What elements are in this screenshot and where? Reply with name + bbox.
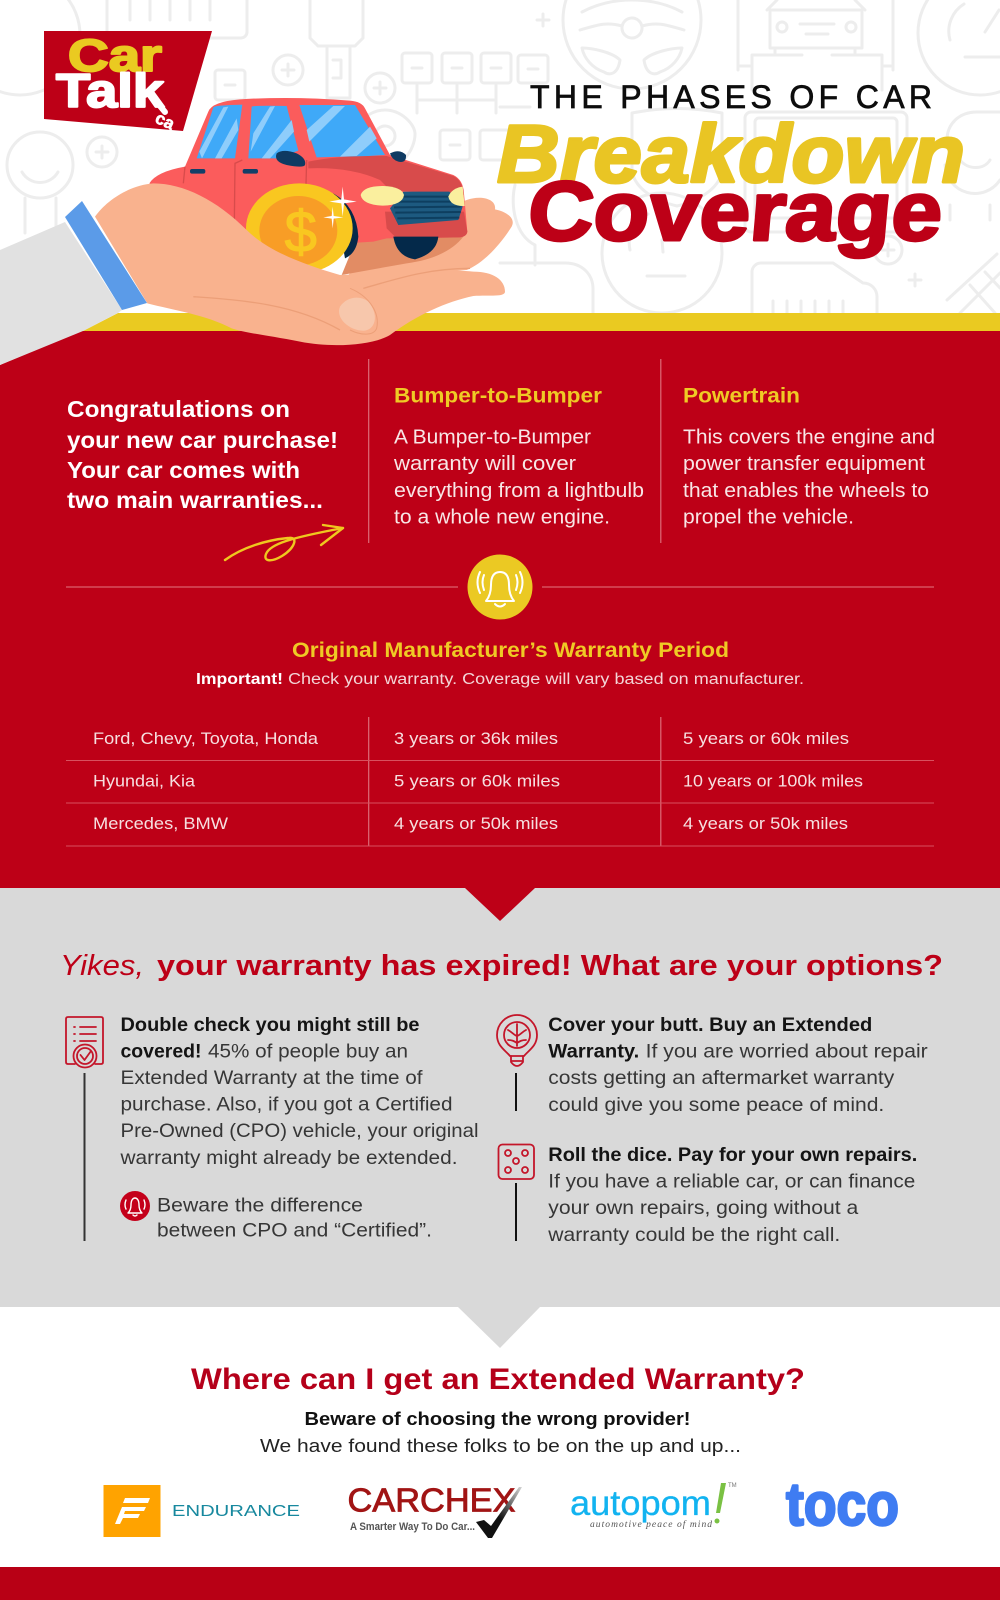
timeline line: first option [84,1073,86,1241]
footer band [0,1567,1000,1600]
logo: Autopom: automotive peace of mind [590,1519,712,1530]
text: double check: covered! [120,1040,202,1062]
table: warranty periods by manufacturer: 3 years or 36k miles [394,729,558,748]
logo: Endurance [104,1485,300,1537]
icon: document with check [66,1017,103,1068]
panel: powertrain [683,384,935,528]
text: extended warranty: costs getting an aftermarket warranty [548,1067,895,1089]
text: extended warranty: Cover your butt. Buy an Extended [548,1014,872,1036]
intro text: Your car comes with [67,457,300,483]
timeline line: second option [515,1073,517,1111]
arrow notch: red pointer [465,888,535,921]
panel: bumper-to-bumper: to a whole new engine. [394,506,610,528]
panel: bumper-to-bumper: A Bumper-to-Bumper [394,426,591,448]
panel: bumper-to-bumper: warranty will cover [393,453,576,475]
logo: Endurance: ENDURANCE [172,1503,300,1520]
text: extended warranty: If you are worried about repair [646,1040,928,1062]
thumb nail [339,298,375,331]
text: double check: warranty might already be extended. [119,1147,458,1169]
yellow band [83,313,1000,331]
text: beware CPO [157,1194,432,1242]
text: double check: 45% of people buy an [208,1040,408,1062]
text: double check [119,1014,479,1169]
panel: powertrain: that enables the wheels to [683,480,929,502]
car [149,98,467,259]
text: double check: Pre-Owned (CPO) vehicle, your original [120,1120,479,1142]
front palm and thumb [95,183,505,345]
logo: Toco: toco [786,1471,899,1538]
thumb outline [350,288,377,334]
timeline line: third option [515,1183,517,1241]
logo: Autopom: autopom [570,1484,711,1523]
icon: small red bell [120,1191,150,1221]
table: warranty periods by manufacturer: 4 years or 50k miles [394,814,558,833]
text: roll the dice: your own repairs, going without a [548,1197,858,1219]
shadow under car [342,237,463,275]
table: warranty periods by manufacturer: Mercedes, BMW [93,814,228,833]
cuff [65,201,147,310]
sleeve [0,222,122,365]
text: double check: purchase. Also, if you got a Certified [120,1094,452,1116]
logo: Car Talk: Talk [56,64,165,117]
finger crease [193,268,470,330]
panel: warranty overview red background [0,331,1000,888]
subheading: important note: Important! [196,671,283,688]
icon: light bulb with brain [497,1015,537,1066]
intro text: your new car purchase! [67,427,338,453]
title line 2: Breakdown [497,109,965,200]
intro text: Congratulations on [67,396,290,422]
table: warranty periods by manufacturer: 4 years or 50k miles [683,814,848,833]
heading: warranty expired: Yikes, [60,950,144,982]
logo: Carchex [348,1482,522,1538]
text: extended warranty: could give you some peace of mind. [548,1094,884,1116]
illustration: hand holding car and coin [0,98,513,365]
arrow: hand-drawn pointer [225,525,343,560]
table: warranty periods by manufacturer: Ford, Chevy, Toyota, Honda [93,729,319,748]
text: roll the dice: If you have a reliable car, or can finance [548,1170,915,1192]
heading: warranty period: Original Manufacturer’s Warranty Period [292,638,729,662]
heading: Powertrain: Powertrain [683,384,800,408]
text: extended warranty: Warranty. [548,1040,639,1062]
panel: powertrain: This covers the engine and [683,426,935,448]
logo: Carchex: A Smarter Way To Do Car... [350,1521,475,1533]
text: beware CPO: Beware the difference [157,1194,363,1216]
panel: bumper-to-bumper [393,384,644,528]
panel: powertrain: propel the vehicle. [683,506,854,528]
column dividers [369,359,661,543]
text: roll the dice [547,1144,917,1246]
heading: Bumper-to-Bumper: Bumper-to-Bumper [394,384,603,408]
title line 1: THE PHASES OF CAR [530,79,932,115]
text: beware CPO: between CPO and “Certified”. [157,1220,432,1242]
table: warranty periods by manufacturer [66,717,934,846]
text: roll the dice: Roll the dice. Pay for your own repairs. [548,1144,917,1166]
intro text: two main warranties... [67,487,323,513]
panel: bumper-to-bumper: everything from a lightbulb [394,480,644,502]
coin: $ [284,200,317,265]
panel: options grey background [0,888,1000,1307]
text: extended warranty [548,1014,928,1116]
arrow notch: grey pointer [458,1307,540,1348]
text: double check: Extended Warranty at the time of [120,1067,423,1089]
table: warranty periods by manufacturer: Hyundai, Kia [93,772,196,790]
panel: powertrain: power transfer equipment [683,453,925,475]
title line 3: Coverage [524,164,947,258]
text: roll the dice: warranty could be the right call. [547,1224,840,1246]
logo: Car Talk [44,30,212,134]
logo: Car Talk: Car [68,30,162,81]
logo: Autopom [570,1483,737,1530]
subheading: important note: Check your warranty. Coverage will vary based on manufacturer. [288,671,804,688]
table: warranty periods by manufacturer: 5 years or 60k miles [683,729,849,748]
back fingers [347,198,513,278]
title [497,79,965,258]
text: provider intro: We have found these folks to be on the up and up... [260,1436,741,1456]
logo: Autopom: TM [728,1483,737,1489]
icon: dice [498,1144,534,1179]
table: warranty periods by manufacturer: 5 years or 60k miles [394,772,560,790]
subheading: provider warning: Beware of choosing the wrong provider! [304,1409,690,1429]
intro text [67,396,338,513]
heading: warranty expired: your warranty has expired! What are your options? [157,950,943,982]
logo: Carchex: CARCHEX [348,1482,516,1518]
sparkles [323,187,357,228]
coin [246,183,353,273]
logo: Car Talk: ca [152,108,178,134]
heading: where to get extended warranty: Where can I get an Extended Warranty? [191,1363,805,1396]
icon: yellow bell [468,554,532,620]
text: double check: Double check you might still be [120,1014,420,1036]
table: warranty periods by manufacturer: 10 years or 100k miles [683,772,863,790]
